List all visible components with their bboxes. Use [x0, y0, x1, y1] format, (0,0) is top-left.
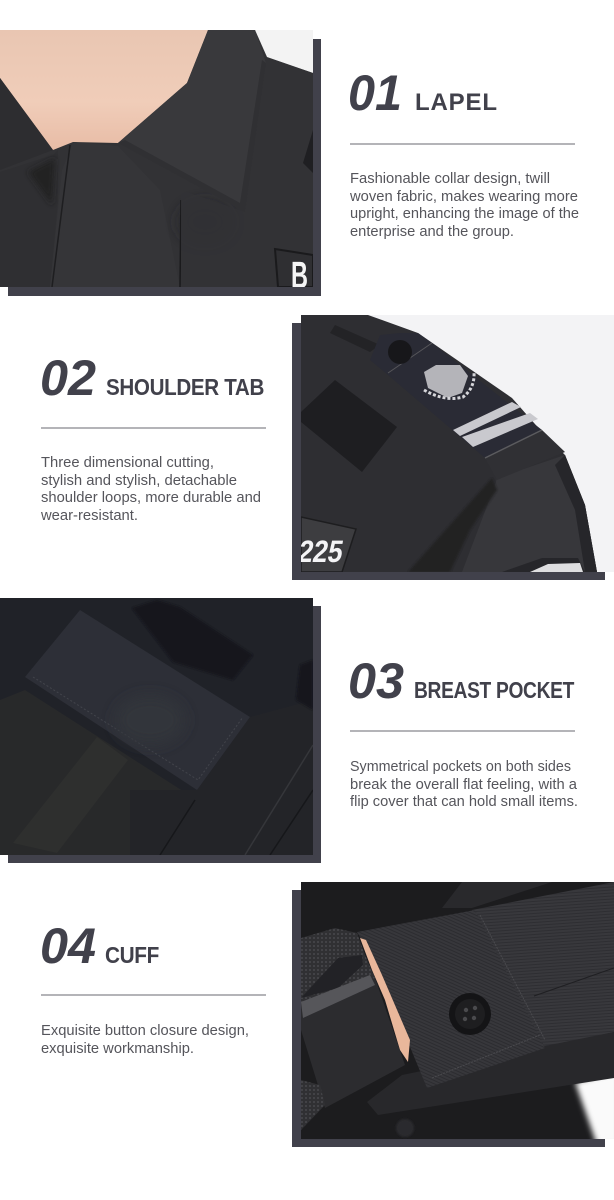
icon: shield badge: [424, 365, 474, 398]
heading: 04 cuff: 04: [40, 918, 96, 974]
epaulette: [375, 333, 565, 458]
heading: 02 shoulder tab: 02: [40, 350, 96, 406]
icon: cuff button: [449, 993, 491, 1035]
text: lapel description: [349, 171, 579, 240]
heading: 01 lapel: [348, 65, 497, 121]
text: breast pocket description: Symmetrical pockets on both sides: [350, 759, 571, 775]
text: cuff description: exquisite workmanship.: [41, 1041, 194, 1057]
text: shoulder tab description: shoulder loops, more durable and: [41, 490, 261, 506]
heading: 04 cuff: CUFF: [105, 942, 159, 968]
heading: 03 breast pocket: BREAST POCKET: [414, 677, 575, 703]
text: breast pocket description: break the overall flat feeling, with a: [350, 777, 578, 793]
panel: lapel photo: [0, 30, 321, 297]
heading: 03 breast pocket: 03: [348, 653, 404, 709]
panel: shoulder tab photo: [292, 315, 614, 580]
cuff: [357, 910, 545, 1088]
text: shoulder tab description: wear-resistant.: [40, 508, 138, 524]
heading: 03 breast pocket: [348, 653, 575, 709]
heading: 01 lapel: 01: [348, 65, 402, 121]
text: shoulder tab description: Three dimensional cutting,: [41, 455, 214, 471]
heading: 01 lapel: LAPEL: [415, 89, 497, 116]
upper sleeve: [442, 882, 552, 908]
velcro strip: [132, 600, 253, 680]
text: breast pocket description: flip cover that can hold small items.: [350, 794, 578, 810]
panel: breast pocket photo: [0, 598, 321, 863]
pocket strap: [13, 737, 128, 853]
name patch: B: [291, 255, 308, 297]
glove: [301, 928, 405, 1130]
pocket flap: [25, 610, 250, 790]
heading: 02 shoulder tab: [40, 350, 264, 406]
text: shoulder tab description: stylish and stylish, detachable: [41, 473, 237, 489]
name patch: [274, 248, 313, 287]
text: lapel description: enterprise and the group.: [350, 224, 514, 240]
panel: cuff photo: [292, 882, 614, 1147]
text: shoulder tab description: [40, 455, 261, 524]
velcro patch: [301, 380, 397, 472]
text: lapel description: Fashionable collar design, twill: [350, 171, 550, 187]
text: lapel description: upright, enhancing the image of the: [350, 206, 579, 222]
text: cuff description: [41, 1023, 249, 1057]
heading: 02 shoulder tab: SHOULDER TAB: [106, 374, 264, 400]
patch: 225: 225: [296, 534, 346, 569]
heading: 04 cuff: [40, 918, 159, 974]
text: breast pocket description: [350, 759, 578, 810]
text: lapel description: woven fabric, makes wearing more: [349, 189, 578, 205]
icon: button: [388, 340, 412, 364]
text: cuff description: Exquisite button closure design,: [41, 1023, 249, 1039]
wrist skin: [360, 938, 410, 1062]
patch: 225: [296, 517, 356, 572]
